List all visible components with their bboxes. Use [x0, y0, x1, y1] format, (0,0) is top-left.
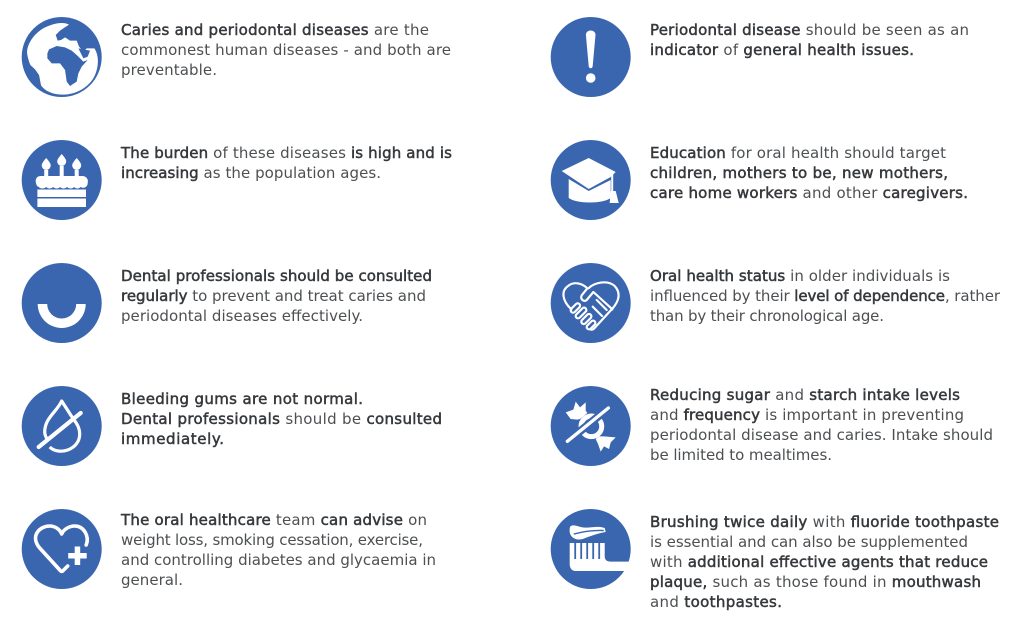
text: reducing sugar: and frequency is important in preventing [650, 406, 964, 424]
icon: crossed-out candy [551, 386, 631, 466]
text: oral health status: influenced by their level of dependence, rather [650, 287, 1001, 305]
text: reducing sugar [650, 386, 993, 464]
icon: crossed-out blood drop [22, 386, 102, 466]
text: dental professionals: periodontal diseases effectively. [121, 307, 363, 325]
text: brushing: Brushing twice daily with fluoride toothpaste [650, 513, 999, 531]
icon: toothbrush with paste [551, 509, 631, 589]
text: brushing [650, 513, 999, 611]
text: oral healthcare team [120, 511, 436, 589]
text: burden of diseases [120, 144, 452, 182]
text: brushing: with additional effective agents that reduce [650, 553, 988, 571]
text: periodontal disease indicator: Periodontal disease should be seen as an [650, 21, 969, 39]
text: periodontal disease indicator: indicator of general health issues. [650, 41, 914, 59]
icon: heart with plus [22, 509, 102, 589]
text: dental professionals: regularly to prevent and treat caries and [121, 287, 426, 305]
icon: smile [22, 263, 102, 343]
icon: globe [22, 17, 102, 97]
text: dental professionals: Dental professionals should be consulted [121, 267, 432, 285]
text: bleeding gums: Bleeding gums are not normal. [121, 390, 363, 408]
icon: birthday cake [22, 140, 102, 220]
text: oral healthcare team: general. [121, 571, 183, 589]
text: education: children, mothers to be, new mothers, [650, 164, 948, 182]
text: burden of diseases: The burden of these diseases is high and is [120, 144, 452, 162]
text: education [650, 144, 968, 202]
text: reducing sugar: be limited to mealtimes. [650, 446, 832, 464]
text: reducing sugar: Reducing sugar and starch intake levels [650, 386, 960, 404]
icon: exclamation mark [551, 17, 631, 97]
text: caries and periodontal diseases: preventable. [121, 61, 217, 79]
text: brushing: plaque, such as those found in mouthwash [650, 573, 981, 591]
text: oral health status: Oral health status in older individuals is [650, 267, 950, 285]
text: caries and periodontal diseases: commonest human diseases - and both are [121, 41, 451, 59]
icon: handshake heart [551, 263, 631, 343]
text: brushing: is essential and can also be supplemented [650, 533, 968, 551]
text: brushing: and toothpastes. [650, 593, 782, 611]
icon: graduation cap [551, 140, 631, 220]
text: bleeding gums [121, 390, 442, 448]
text: dental professionals [121, 267, 432, 325]
text: caries and periodontal diseases [121, 21, 451, 79]
text: burden of diseases: increasing as the population ages. [121, 164, 381, 182]
text: education: care home workers and other caregivers. [650, 184, 968, 202]
text: oral healthcare team: The oral healthcare team can advise on [120, 511, 427, 529]
text: oral healthcare team: weight loss, smoking cessation, exercise, [121, 531, 423, 549]
text: oral health status [650, 267, 1001, 325]
text: oral health status: than by their chronological age. [650, 307, 884, 325]
text: reducing sugar: periodontal disease and caries. Intake should [650, 426, 993, 444]
text: education: Education for oral health should target [650, 144, 946, 162]
text: caries and periodontal diseases: Caries and periodontal diseases are the [121, 21, 429, 39]
text: bleeding gums: Dental professionals should be consulted [121, 410, 442, 428]
text: bleeding gums: immediately. [121, 430, 224, 448]
text: periodontal disease indicator [650, 21, 969, 59]
text: oral healthcare team: and controlling diabetes and glycaemia in [121, 551, 436, 569]
